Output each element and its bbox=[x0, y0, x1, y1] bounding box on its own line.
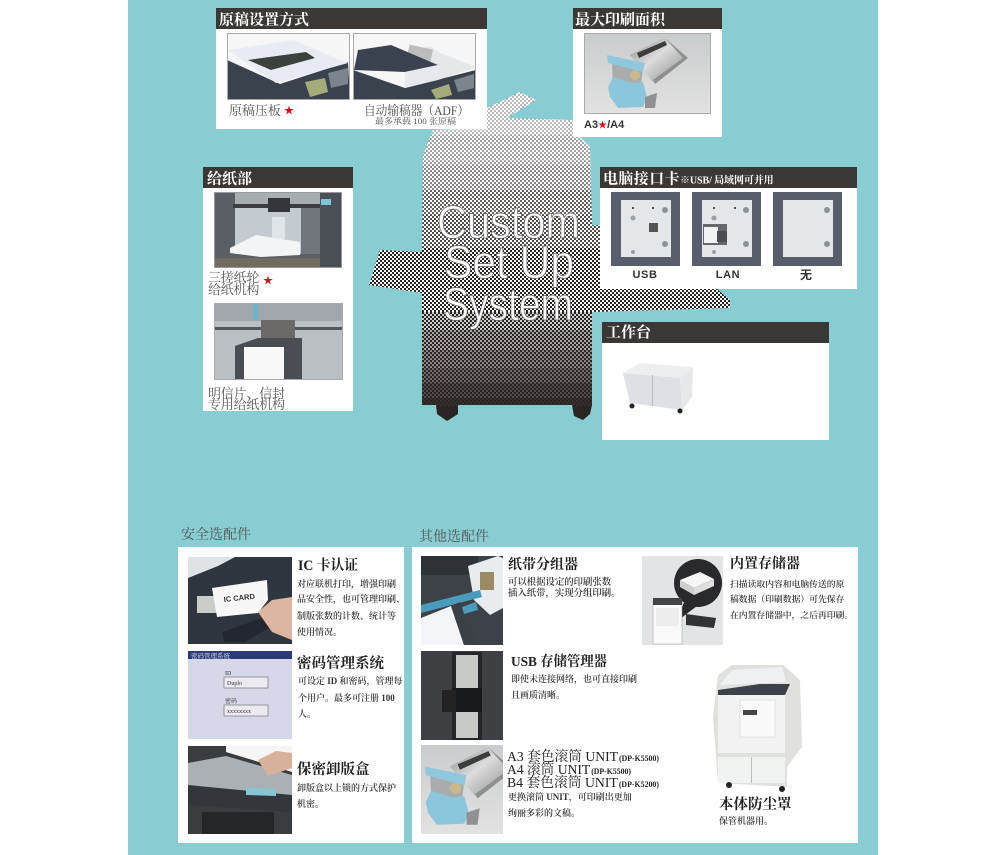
text: internal storage: 在内置存储器中，之后再印刷。 bbox=[730, 609, 853, 621]
photo: work table bbox=[623, 363, 693, 414]
panel: original placement bbox=[216, 8, 487, 129]
screen: password system bbox=[188, 651, 292, 739]
text: secure master box bbox=[297, 782, 396, 809]
heading: tape cluster kit: 纸带分组器 bbox=[508, 556, 578, 573]
text: IC card: 使用情况。 bbox=[297, 626, 342, 637]
photo: colour drum unit bbox=[421, 745, 503, 834]
photo: secure master box bbox=[188, 746, 292, 834]
heading: USB memory manager: USB 存储管理器 bbox=[511, 653, 607, 670]
heading: password system: 密码管理系统 bbox=[297, 654, 385, 672]
photo: tape cluster kit bbox=[421, 556, 503, 645]
label: A3 / A4: A3★/A4 bbox=[584, 119, 625, 131]
text: password system: 可设定 ID 和密码，管理每 bbox=[298, 675, 403, 687]
screen: password system: 密码 bbox=[225, 697, 237, 705]
heading: PC interface card: 电脑接口卡※USB/ 局域网可并用 bbox=[603, 170, 774, 188]
icon: red star: ★ bbox=[284, 106, 294, 117]
photo: no card bbox=[773, 192, 842, 266]
text: password system bbox=[298, 675, 403, 719]
heading: colour drum units: A4 滚筒 UNIT(DP-K5500) bbox=[507, 762, 631, 778]
photo: machine dust cover bbox=[713, 665, 802, 792]
panel: max print area bbox=[573, 8, 722, 137]
caption: three-roller feed: 三搓纸轮 bbox=[208, 270, 259, 285]
photo: USB card bbox=[611, 192, 680, 266]
heading: original placement: 原稿设置方式 bbox=[219, 10, 309, 28]
label: LAN: LAN bbox=[716, 269, 740, 281]
text: IC card: 品安全性，也可管理印刷、 bbox=[297, 593, 405, 605]
teal background bbox=[128, 0, 878, 855]
text: dust cover: 保管机器用。 bbox=[719, 815, 773, 826]
photo: platen cover bbox=[227, 33, 350, 100]
text: colour drum units: 绚丽多彩的文稿。 bbox=[508, 807, 580, 818]
text: IC card bbox=[297, 578, 405, 637]
heading: colour drum units: A3 套色滚筒 UNIT(DP-K5500) bbox=[507, 749, 659, 765]
halftone machine silhouette bbox=[360, 88, 740, 422]
photo: ADF bbox=[353, 33, 476, 100]
photo: LAN card bbox=[692, 192, 761, 266]
heading: paper feed: 给纸部 bbox=[207, 170, 252, 188]
panel: other options bbox=[412, 547, 858, 843]
text: internal storage bbox=[730, 578, 853, 621]
text: USB memory manager: 且画质清晰。 bbox=[511, 689, 565, 700]
photo: IC card: IC CARD bbox=[223, 592, 256, 604]
text: USB memory manager bbox=[511, 673, 637, 700]
text: secure master box: 机密。 bbox=[297, 798, 324, 809]
text: secure master box: 卸版盒以上锁的方式保护 bbox=[297, 782, 396, 793]
text: password system: 个用户。最多可注册 100 bbox=[298, 692, 395, 703]
photo: three-roller feed bbox=[214, 192, 342, 268]
text: password system: 人。 bbox=[298, 708, 316, 719]
heading: secure master box: 保密卸版盒 bbox=[297, 760, 370, 778]
panel: paper feed bbox=[203, 167, 353, 412]
heading: work table: 工作台 bbox=[606, 323, 652, 341]
caption: platen cover: 原稿压板 bbox=[229, 103, 281, 118]
icon: red star: ★ bbox=[263, 276, 273, 287]
text: tape cluster kit bbox=[508, 576, 621, 599]
text: tape cluster kit: 插入纸带，实现分组印刷。 bbox=[508, 587, 621, 599]
panel: security options bbox=[178, 547, 405, 843]
text: IC card: 对应联机打印，增强印刷 bbox=[297, 578, 396, 590]
panel: work table bbox=[602, 322, 829, 440]
heading: dust cover: 本体防尘罩 bbox=[719, 795, 792, 813]
heading: internal storage: 内置存储器 bbox=[730, 555, 800, 572]
screen: password system: ID bbox=[225, 671, 232, 677]
machine title: Custom Set Up System: System bbox=[443, 278, 573, 330]
text: USB memory manager: 即使未连接网络，也可直接印刷 bbox=[511, 673, 637, 685]
label: other options: 其他选配件 bbox=[419, 529, 489, 545]
photo: internal storage bbox=[642, 556, 723, 645]
label: security options: 安全选配件 bbox=[181, 527, 251, 543]
text: internal storage: 稿数据（印刷数据）可先保存 bbox=[730, 593, 845, 604]
heading: IC card: IC 卡认证 bbox=[298, 556, 358, 574]
screen: password system: Duplo bbox=[227, 681, 242, 687]
heading: max print area: 最大印刷面积 bbox=[575, 10, 667, 28]
caption: feed mechanism: 给纸机构 bbox=[208, 282, 259, 297]
photo: USB flash drive bbox=[421, 651, 503, 740]
heading: colour drum units: B4 套色滚筒 UNIT(DP-K5200) bbox=[507, 775, 659, 791]
caption: postcard and envelope: 明信片、信封 bbox=[208, 386, 285, 401]
screen: password system: xxxxxxxx bbox=[227, 709, 251, 715]
photo: postcard feed bbox=[214, 303, 343, 380]
screen: password system: 密码管理系统 bbox=[191, 651, 230, 660]
caption: ADF: 自动输稿器（ADF） bbox=[364, 103, 469, 118]
text: colour drum units bbox=[508, 791, 632, 818]
heading: colour drum units bbox=[507, 749, 659, 791]
machine title: Custom Set Up System: Custom bbox=[437, 196, 580, 248]
label: USB: USB bbox=[632, 269, 658, 281]
caption: ADF capacity: 最多承载 100 张原稿 bbox=[375, 116, 457, 126]
label: none: 无 bbox=[800, 268, 812, 282]
text: internal storage: 扫描读取内容和电脑传送的原 bbox=[730, 578, 845, 589]
photo: drum unit bbox=[584, 33, 711, 114]
machine title: Custom Set Up System bbox=[437, 196, 580, 330]
text: tape cluster kit: 可以根据设定的印刷张数 bbox=[508, 576, 612, 588]
text: colour drum units: 更换滚筒 UNIT，可印刷出更加 bbox=[508, 791, 632, 803]
panel: PC interface card bbox=[600, 167, 857, 289]
text: IC card: 制版张数的计数、统计等 bbox=[297, 610, 396, 621]
machine title: Custom Set Up System: Set Up bbox=[444, 236, 574, 288]
photo: IC card bbox=[188, 557, 292, 644]
caption: dedicated feed mechanism: 专用给纸机构 bbox=[208, 397, 285, 412]
